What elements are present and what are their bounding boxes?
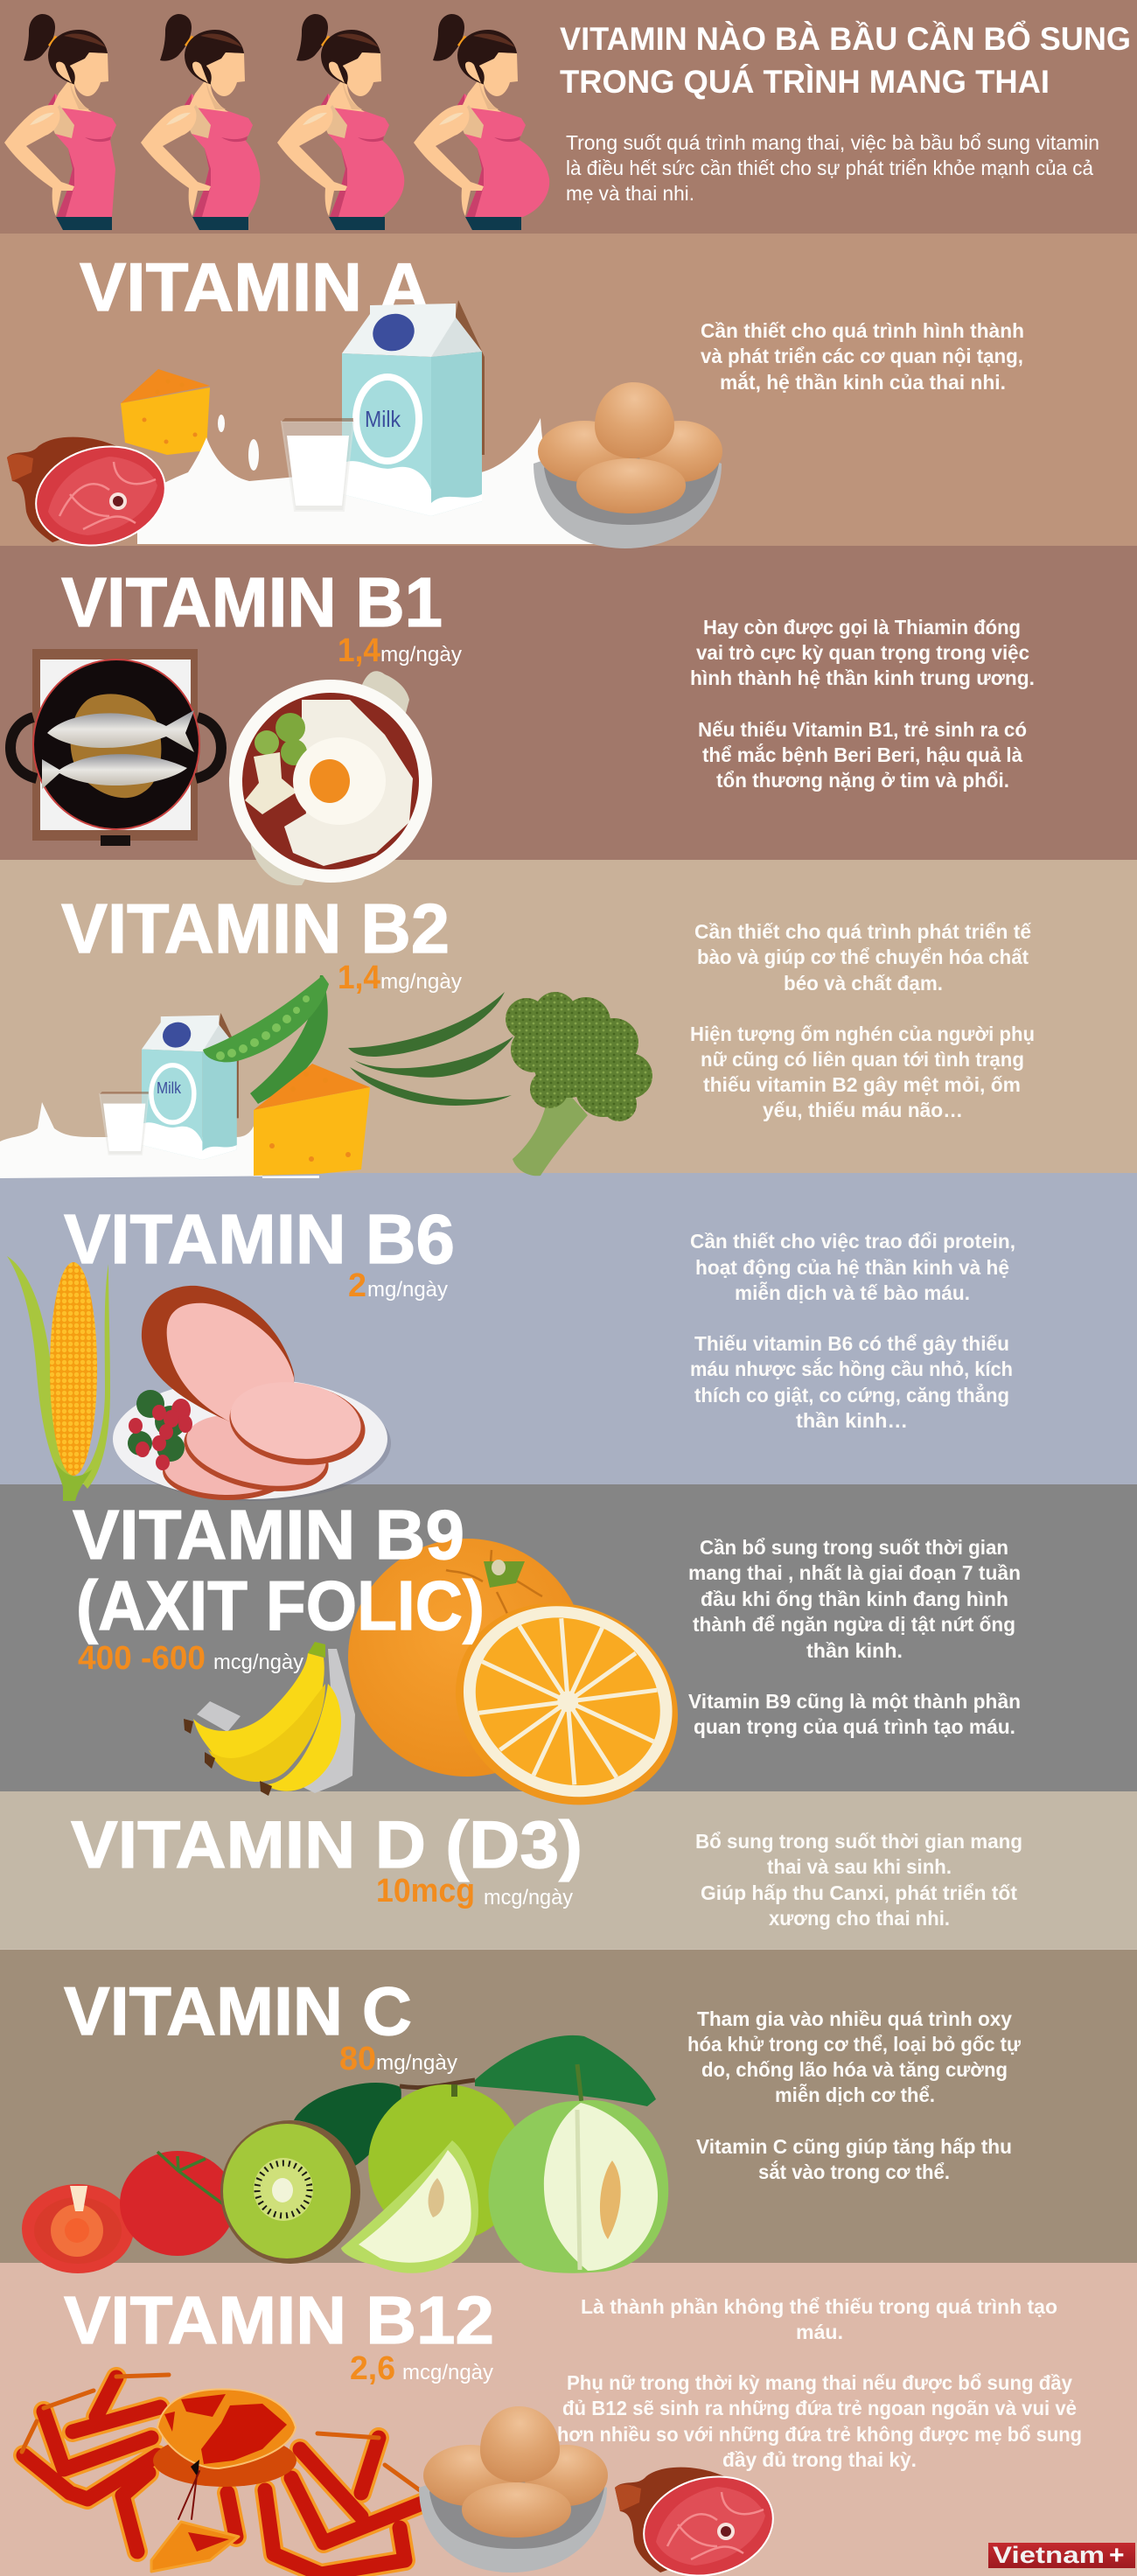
text block: vitamin B9 description: đầu khi ống thần kinh đang hình bbox=[701, 1588, 1008, 1610]
text block: vitamin C description: Tham gia vào nhiều quá trình oxy bbox=[697, 2007, 1012, 2030]
text block: vitamin B1 description: Hay còn được gọi là Thiamin đóng bbox=[703, 616, 1021, 639]
icon: milk carton bbox=[142, 1013, 239, 1160]
text block: vitamin B1 description: vai trò cực kỳ quan trọng trong việc bbox=[696, 641, 1029, 664]
icon: green beans bbox=[348, 992, 513, 1106]
icon: bowl of eggs bbox=[534, 382, 722, 548]
panel: vitamin A bbox=[0, 234, 1137, 560]
text block: vitamin B9 description: Vitamin B9 cũng là một thành phần bbox=[688, 1690, 1021, 1713]
text block: vitamin B1 description: Nếu thiếu Vitamin B1, trẻ sinh ra có bbox=[698, 718, 1027, 741]
dose: 10mcg mcg/ngày: mcg/ngày bbox=[484, 1886, 573, 1909]
icon: crab bbox=[22, 2375, 426, 2574]
dose: 80 mg/ngày bbox=[339, 2041, 457, 2077]
text block: vitamin C description: miễn dịch cơ thể. bbox=[775, 2083, 935, 2106]
dose: 400 - 600 mcg/ngày: mcg/ngày bbox=[213, 1651, 303, 1674]
heading: vitamin B2: VITAMIN B2 bbox=[61, 890, 450, 967]
text block: vitamin B2 description bbox=[690, 920, 1035, 1121]
dose: 1,4 mg/ngày: mg/ngày bbox=[380, 970, 462, 994]
panel: vitamin D (D3) bbox=[0, 1791, 1137, 1949]
heading: vitamin D (D3): VITAMIN D (D3) bbox=[71, 1808, 582, 1882]
text block: vitamin B6 description bbox=[690, 1230, 1015, 1432]
icon: fruit group bbox=[22, 2035, 668, 2273]
icon: pea pods bbox=[203, 975, 329, 1104]
icon: milk carton: Milk bbox=[365, 406, 401, 432]
text block: vitamin B6 description: miễn dịch và tế bào máu. bbox=[735, 1281, 970, 1304]
text block: vitamin B12 description: đầy đủ trong thai kỳ. bbox=[722, 2448, 917, 2471]
text block: intro bbox=[566, 131, 1099, 205]
panel: vitamin B2 bbox=[0, 860, 1137, 1178]
icon: pregnant woman, second stage bbox=[141, 14, 260, 230]
text block: vitamin B6 description: Thiếu vitamin B6 có thể gây thiếu bbox=[694, 1332, 1009, 1355]
icon: kiwi bbox=[220, 2120, 360, 2264]
title: TRONG QUÁ TRÌNH MANG THAI bbox=[560, 64, 1050, 100]
icon: pan of fried fish bbox=[10, 649, 221, 846]
dose: 1,4 mg/ngày: 1,4 bbox=[338, 632, 380, 669]
text block: vitamin A description: Cần thiết cho quá trình hình thành bbox=[701, 319, 1024, 342]
text block: vitamin D description: Giúp hấp thu Canxi, phát triển tốt bbox=[701, 1881, 1017, 1904]
icon: back guava bbox=[368, 2080, 524, 2242]
icon: ham bbox=[7, 432, 177, 560]
icon: whole tomato bbox=[120, 2151, 235, 2256]
dose: 80 mg/ngày: 80 bbox=[339, 2041, 376, 2077]
icon: milk splash bbox=[137, 415, 595, 544]
heading: vitamin B1: VITAMIN B1 bbox=[61, 563, 443, 641]
panel: vitamin B9 bbox=[0, 1484, 1137, 1840]
text block: vitamin B2 description: bào và giúp cơ thể chuyển hóa chất bbox=[697, 946, 1029, 968]
text block: intro: mẹ và thai nhi. bbox=[566, 182, 694, 205]
dose: 1,4 mg/ngày bbox=[338, 632, 462, 669]
icon: pregnant woman, third stage bbox=[277, 14, 404, 230]
text block: vitamin D description: xương cho thai nhi. bbox=[769, 1907, 950, 1930]
text block: vitamin B12 description: Là thành phần không thể thiếu trong quá trình tạo bbox=[581, 2295, 1057, 2318]
text block: vitamin B9 description: thần kinh. bbox=[806, 1639, 903, 1662]
text block: vitamin B6 description: Cần thiết cho việc trao đổi protein, bbox=[690, 1230, 1015, 1253]
dose: 2,6 mcg/ngày bbox=[350, 2350, 493, 2387]
dose: 10mcg mcg/ngày: 10mcg bbox=[376, 1873, 475, 1909]
icon: plate of ham bbox=[113, 1286, 391, 1504]
title bbox=[560, 19, 1131, 100]
icon: left leaf bbox=[294, 2083, 401, 2166]
dose: 80 mg/ngày: mg/ngày bbox=[376, 2051, 457, 2075]
dose: 2 mg/ngày bbox=[348, 1267, 448, 1304]
icon: milk carton: Milk bbox=[157, 1079, 182, 1097]
icon: guava half bbox=[488, 2064, 668, 2273]
logo: Vietnam+ bbox=[988, 2541, 1135, 2570]
text block: intro: Trong suốt quá trình mang thai, việc bà bầu bổ sung vitamin bbox=[566, 131, 1099, 154]
text block: vitamin A description: và phát triển các cơ quan nội tạng, bbox=[701, 345, 1023, 367]
text block: vitamin C description: Vitamin C cũng giúp tăng hấp thu bbox=[696, 2135, 1012, 2158]
icon: pregnant woman, late stage bbox=[414, 14, 549, 230]
heading: vitamin B9 (axit folic): VITAMIN B9 bbox=[73, 1496, 464, 1574]
text block: vitamin B2 description: Cần thiết cho quá trình phát triển tế bbox=[694, 920, 1031, 943]
icon: glass of milk bbox=[100, 1092, 149, 1155]
heading: vitamin B12: VITAMIN B12 bbox=[64, 2283, 494, 2358]
icon: glass of milk bbox=[282, 418, 353, 511]
icon: milk splash bbox=[0, 1102, 319, 1178]
text block: vitamin D description: thai và sau khi sinh. bbox=[767, 1855, 952, 1878]
text block: vitamin A description: mắt, hệ thần kinh của thai nhi. bbox=[720, 370, 1006, 394]
text block: vitamin B12 description: đủ B12 sẽ sinh ra những đứa trẻ ngoan ngoãn và vui vẻ bbox=[562, 2397, 1077, 2419]
text block: vitamin B2 description: Hiện tượng ốm nghén của người phụ bbox=[690, 1023, 1035, 1045]
text block: vitamin D description: Bổ sung trong suốt thời gian mang bbox=[695, 1830, 1022, 1853]
panel: vitamin C bbox=[0, 1948, 1137, 2273]
icon: broccoli bbox=[506, 992, 652, 1176]
text block: vitamin B12 description: Phụ nữ trong thời kỳ mang thai nếu được bổ sung đầy bbox=[567, 2371, 1072, 2394]
text block: vitamin B2 description: yếu, thiếu máu não… bbox=[763, 1099, 963, 1121]
text block: vitamin D description bbox=[695, 1830, 1022, 1930]
logo: Vietnam+: Vietnam bbox=[993, 2542, 1105, 2568]
panel: header bbox=[0, 0, 1137, 234]
text block: vitamin B9 description: Cần bổ sung trong suốt thời gian bbox=[700, 1536, 1008, 1559]
text block: vitamin B2 description: béo và chất đạm. bbox=[784, 972, 943, 995]
text block: vitamin B1 description bbox=[690, 616, 1035, 792]
text block: vitamin C description bbox=[687, 2007, 1021, 2183]
text block: vitamin C description: sắt vào trong cơ thể. bbox=[758, 2160, 950, 2183]
heading: vitamin A: VITAMIN A bbox=[80, 248, 429, 325]
dose: 2 mg/ngày: mg/ngày bbox=[367, 1278, 448, 1302]
dose: 400 - 600 mcg/ngày bbox=[78, 1640, 303, 1677]
text block: vitamin B6 description: thần kinh… bbox=[796, 1409, 908, 1432]
dose: 400 - 600 mcg/ngày: 400 -600 bbox=[78, 1640, 206, 1677]
text block: vitamin B2 description: thiếu vitamin B2 gây mệt mỏi, ốm bbox=[703, 1073, 1021, 1096]
dose: 1,4 mg/ngày: mg/ngày bbox=[380, 643, 462, 667]
text block: intro: là điều hết sức cần thiết cho sự phát triển khỏe mạnh của cả bbox=[566, 157, 1093, 179]
icon: bananas bbox=[184, 1642, 355, 1796]
icon: pregnant woman, early stage bbox=[4, 14, 116, 230]
dose: 2,6 mcg/ngày: mcg/ngày bbox=[402, 2361, 493, 2384]
icon: halved tomato bbox=[22, 2184, 134, 2273]
logo: Vietnam+: + bbox=[1109, 2541, 1125, 2570]
dose: 2,6 mcg/ngày: 2,6 bbox=[350, 2350, 395, 2387]
icon: bowl of rice with egg bbox=[229, 671, 432, 885]
dose: 2 mg/ngày: 2 bbox=[348, 1267, 366, 1304]
text block: vitamin C description: hóa khử trong cơ thể, loại bỏ gốc tự bbox=[687, 2033, 1021, 2056]
dose: 1,4 mg/ngày bbox=[338, 960, 462, 996]
dose: 1,4 mg/ngày: 1,4 bbox=[338, 960, 380, 996]
text block: vitamin B12 description bbox=[557, 2295, 1082, 2471]
text block: vitamin B9 description: mang thai , nhất là giai đoạn 7 tuần bbox=[688, 1561, 1021, 1584]
text block: vitamin B6 description: hoạt động của hệ thần kinh và hệ bbox=[695, 1256, 1009, 1279]
icon: half orange bbox=[422, 1567, 711, 1840]
icon: bowl of eggs bbox=[419, 2406, 608, 2573]
icon: milk carton bbox=[342, 300, 485, 516]
text block: vitamin A description bbox=[701, 319, 1024, 394]
heading: vitamin C: VITAMIN C bbox=[64, 1972, 412, 2049]
text block: vitamin C description: do, chống lão hóa và tăng cường bbox=[701, 2058, 1008, 2081]
panel: vitamin B12 bbox=[0, 2263, 1137, 2576]
icon: whole orange bbox=[348, 1539, 586, 1777]
dose: 10mcg mcg/ngày bbox=[376, 1873, 573, 1909]
title: VITAMIN NÀO BÀ BẦU CẦN BỔ SUNG bbox=[560, 19, 1131, 57]
panel: vitamin B6 bbox=[0, 1173, 1137, 1504]
text block: vitamin B12 description: hơn nhiều so với những đứa trẻ không được mẹ bổ sung bbox=[557, 2423, 1082, 2446]
heading: vitamin B9 (axit folic): (AXIT FOLIC) bbox=[76, 1567, 485, 1644]
text block: vitamin B12 description: máu. bbox=[796, 2321, 843, 2343]
text block: vitamin B6 description: máu nhược sắc hồng cầu nhỏ, kích bbox=[690, 1357, 1013, 1380]
panel: vitamin B1 bbox=[0, 546, 1137, 885]
heading: vitamin B6: VITAMIN B6 bbox=[64, 1200, 455, 1278]
text block: vitamin B2 description: nữ cũng có liên quan tới tình trạng bbox=[701, 1048, 1024, 1071]
heading: vitamin B9 (axit folic) bbox=[73, 1496, 485, 1644]
icon: right leaf bbox=[475, 2035, 656, 2106]
icon: guava wedge bbox=[341, 2140, 478, 2273]
text block: vitamin B9 description: thành để ngăn ngừa dị tật nứt ống bbox=[693, 1613, 1015, 1636]
icon: ham bbox=[615, 2462, 785, 2576]
icon: cheese wedge bbox=[254, 1064, 370, 1176]
text block: vitamin B1 description: thể mắc bệnh Beri Beri, hậu quả là bbox=[702, 743, 1022, 766]
text block: vitamin B6 description: thích co giật, co cứng, căng thẳng bbox=[694, 1382, 1009, 1407]
text block: vitamin B1 description: tổn thương nặng ở tim và phổi. bbox=[716, 769, 1009, 792]
text block: vitamin B9 description bbox=[688, 1536, 1021, 1738]
icon: cheese wedge bbox=[121, 369, 210, 455]
icon: corn bbox=[7, 1256, 110, 1501]
text block: vitamin B1 description: hình thành hệ thần kinh trung ương. bbox=[690, 667, 1035, 689]
text block: vitamin B9 description: quan trọng của quá trình tạo máu. bbox=[694, 1715, 1015, 1738]
